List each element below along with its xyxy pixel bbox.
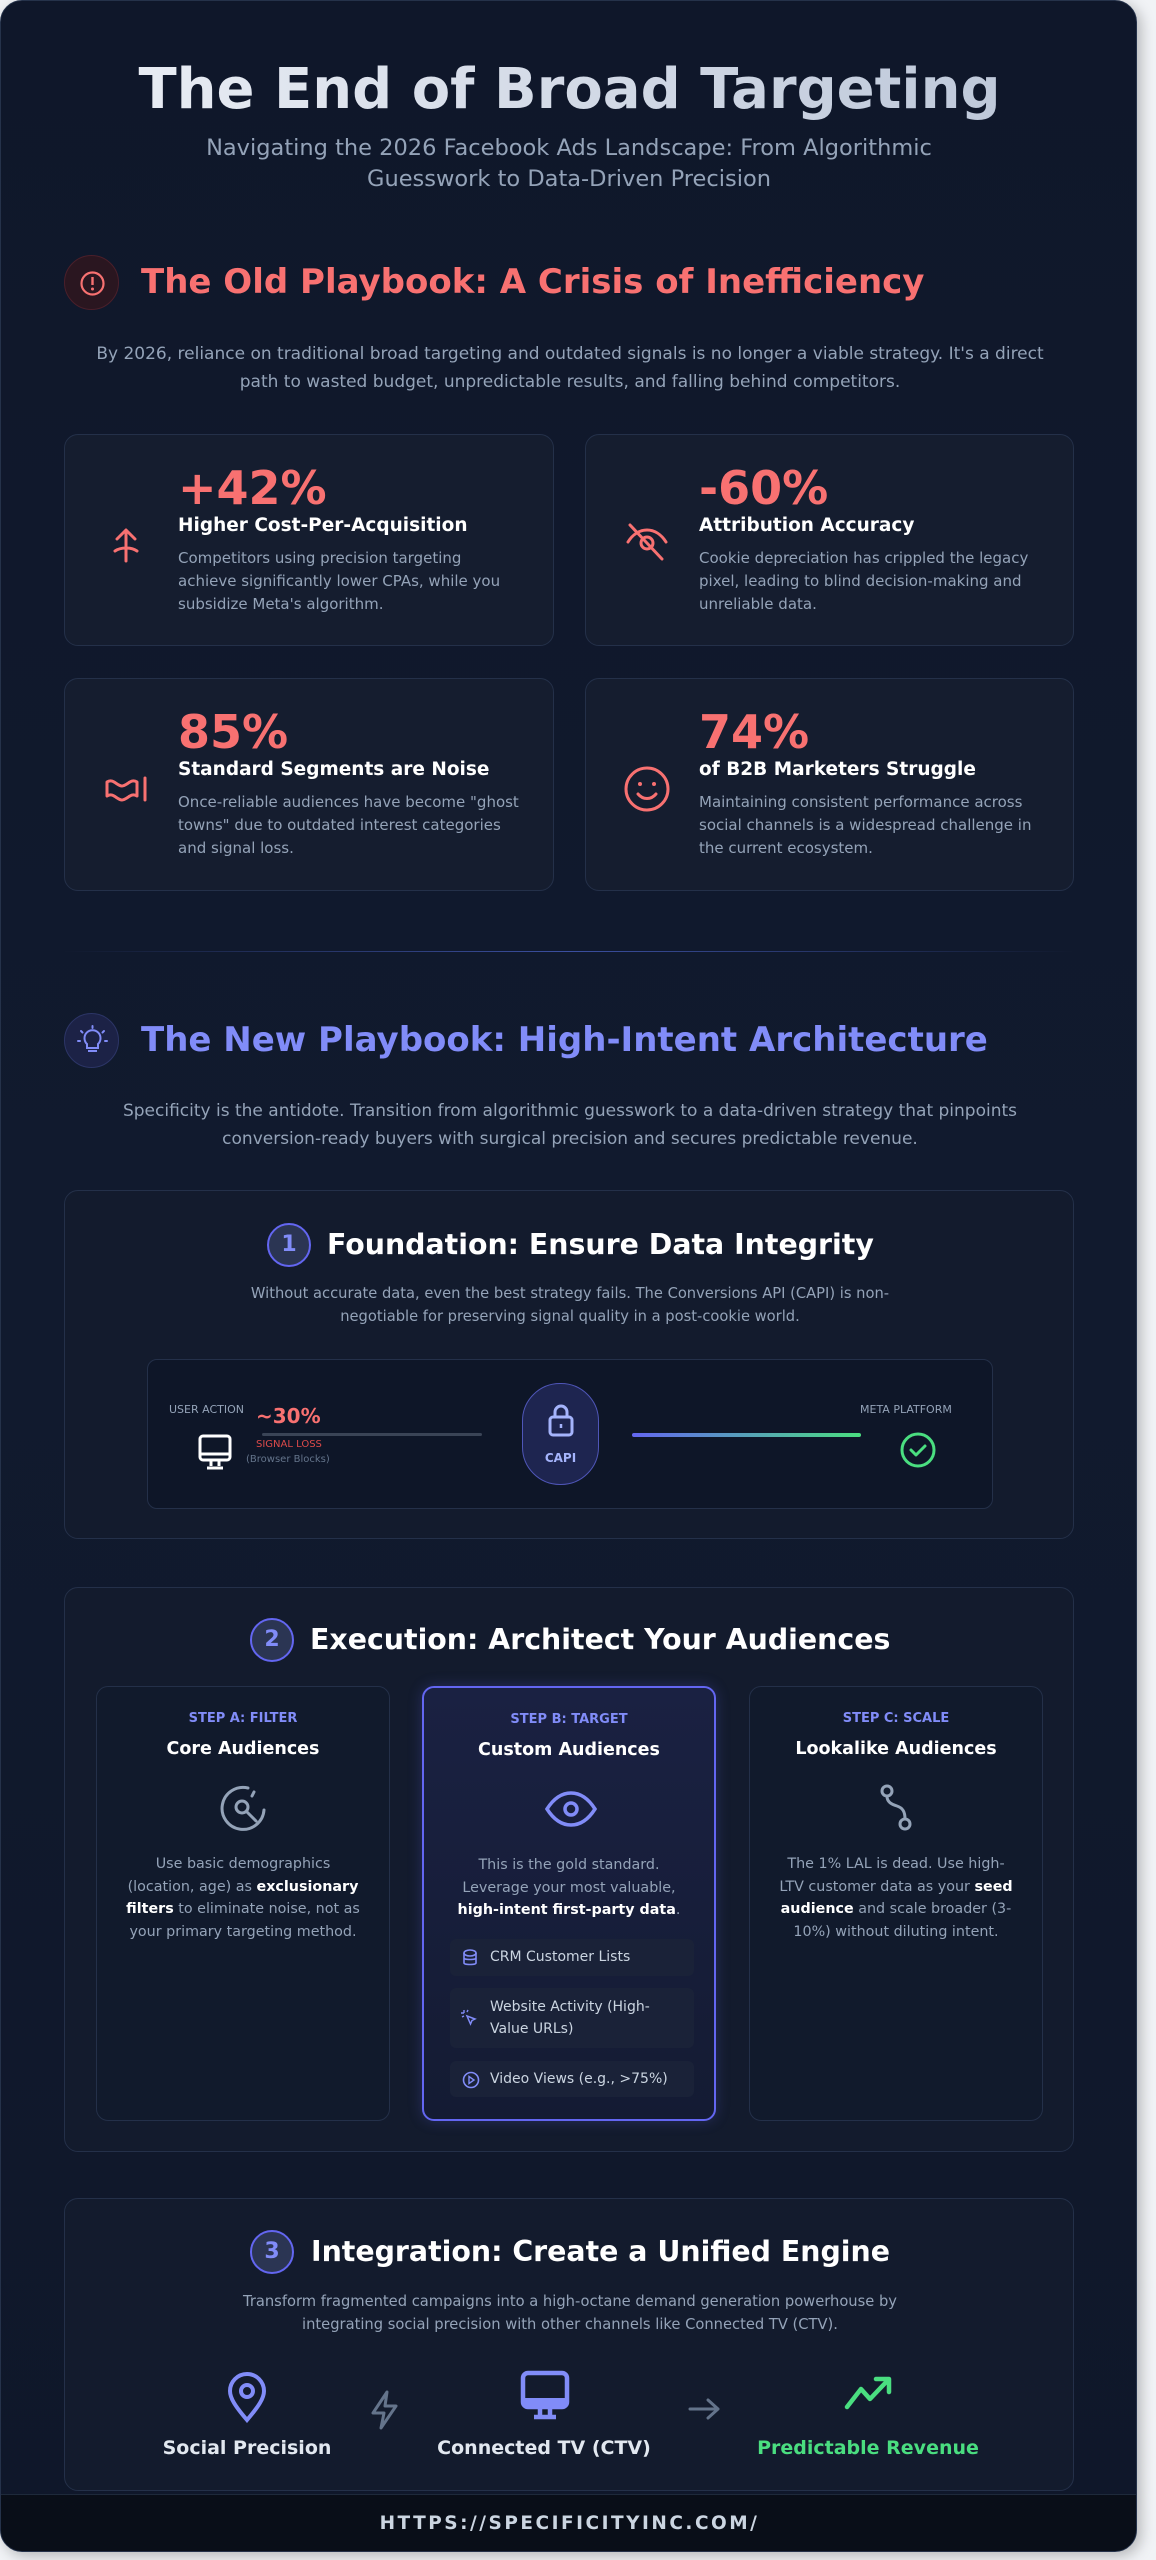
panel: integration <box>64 2198 1074 2491</box>
panel: stat 85%: Once-reliable audiences have become "ghost towns" due to outdated interest categories and signal loss. <box>178 793 519 857</box>
icon: target search <box>220 1786 266 1831</box>
column: custom audiences: This is the gold standard. Leverage your most valuable, high-intent first-party data. <box>458 1857 680 1918</box>
column: lookalike audiences: The 1% LAL is dead. Use high-LTV customer data as your seed audience and scale broader (3-10%) without diluting intent. <box>779 1856 1013 1940</box>
column: custom audiences <box>422 1686 716 2121</box>
column: lookalike audiences: STEP C: SCALE <box>843 1711 949 1726</box>
column: core audiences: Core Audiences <box>166 1739 319 1759</box>
subtitle: Navigating the 2026 Facebook Ads Landscape: From Algorithmic Guesswork to Data-Driven Precision <box>206 135 932 192</box>
step number 3 <box>250 2230 294 2274</box>
heading: new playbook: The New Playbook: High-Intent Architecture <box>141 1020 988 1060</box>
step number 2 <box>250 1618 294 1662</box>
footer: HTTPS://SPECIFICITYINC.COM/ <box>380 2513 759 2534</box>
panel: stat -60%: Cookie depreciation has crippled the legacy pixel, leading to blind decision-making and unreliable data. <box>699 549 1028 613</box>
step number 2: 2 <box>264 1627 280 1652</box>
panel: stat 74%: of B2B Marketers Struggle <box>699 759 976 780</box>
title: The End of Broad Targeting <box>138 57 1001 122</box>
panel: stat +42%: Higher Cost-Per-Acquisition <box>178 515 468 536</box>
panel: stat 74%: 74% <box>699 705 809 759</box>
icon: tv monitor <box>520 2370 570 2420</box>
panel: foundation <box>64 1190 1074 1539</box>
panel: stat 85%: 85% <box>178 705 288 759</box>
icon: CAPI lock <box>522 1383 599 1485</box>
step number 3: 3 <box>264 2239 280 2264</box>
column: lookalike audiences <box>749 1686 1043 2121</box>
icon: location pin <box>228 2372 266 2423</box>
panel: stat +42%: Competitors using precision targeting achieve significantly lower CPAs, while you subsidize Meta's algorithm. <box>178 549 500 613</box>
column: lookalike audiences: Lookalike Audiences <box>795 1739 997 1759</box>
step number 1 <box>267 1223 311 1267</box>
panel: execution <box>64 1587 1074 2152</box>
icon: CAPI lock: CAPI <box>545 1451 576 1465</box>
panel: stat +42% <box>64 434 554 646</box>
label: social precision: Social Precision <box>163 2437 331 2459</box>
panel: stat 85% <box>64 678 554 891</box>
icon: eye <box>545 1791 597 1827</box>
label: user action: USER ACTION <box>169 1403 244 1416</box>
panel: stat -60%: -60% <box>699 461 828 515</box>
intro text: new playbook: Specificity is the antidote. Transition from algorithmic guesswork to a data-driven strategy that pinpoints conversion-ready buyers with surgical precision and secures predictable revenue. <box>123 1101 1017 1149</box>
panel: stat -60% <box>585 434 1074 646</box>
text: integration: Transform fragmented campaigns into a high-octane demand generation powerhouse by integrating social precision with other channels like Connected TV (CTV). <box>243 2293 897 2333</box>
column: core audiences: STEP A: FILTER <box>189 1711 297 1726</box>
diagram: data flow: (Browser Blocks) <box>246 1454 330 1465</box>
icon: trending up <box>844 2376 892 2410</box>
label: connected tv: Connected TV (CTV) <box>437 2437 651 2459</box>
heading: execution: Execution: Architect Your Audiences <box>310 1623 890 1656</box>
icon: monitor <box>198 1434 232 1470</box>
list item: CRM: CRM Customer Lists <box>490 1949 630 1965</box>
panel: stat -60%: Attribution Accuracy <box>699 515 914 536</box>
icon: noise wave <box>106 776 146 802</box>
icon: arrow split <box>113 528 139 562</box>
icon: lightning <box>371 2390 398 2430</box>
list item: video: Video Views (e.g., >75%) <box>490 2071 668 2087</box>
icon: check <box>900 1432 936 1468</box>
list item: CRM <box>450 1939 694 1976</box>
column: core audiences: Use basic demographics (location, age) as exclusionary filters to eliminate noise, not as your primary targeting method. <box>126 1856 360 1940</box>
heading: foundation: Foundation: Ensure Data Integrity <box>327 1228 874 1261</box>
heading: old playbook: The Old Playbook: A Crisis of Inefficiency <box>141 262 924 302</box>
icon: alert <box>64 255 119 310</box>
intro text: old playbook: By 2026, reliance on traditional broad targeting and outdated signals is no longer a viable strategy. It's a direct path to wasted budget, unpredictable results, and falling behind competitors. <box>96 344 1044 392</box>
label: meta platform: META PLATFORM <box>860 1403 952 1416</box>
text: foundation: Without accurate data, even the best strategy fails. The Conversions API (CAPI) is non-negotiable for preserving signal quality in a post-cookie world. <box>251 1285 889 1325</box>
panel: stat 85%: Standard Segments are Noise <box>178 759 489 780</box>
label: predictable revenue: Predictable Revenue <box>757 2437 979 2459</box>
arrow <box>688 2398 720 2420</box>
list item: video <box>450 2061 694 2097</box>
icon: route <box>880 1784 912 1830</box>
signal loss stat: ~30% <box>256 1404 321 1428</box>
icon: bulb <box>64 1013 119 1068</box>
list item: website: Website Activity (High-Value URLs) <box>490 1999 650 2037</box>
column: custom audiences: STEP B: TARGET <box>510 1712 628 1727</box>
diagram: data flow <box>147 1359 993 1509</box>
step number 1: 1 <box>281 1232 297 1257</box>
list item: website <box>450 1988 694 2048</box>
column: custom audiences: Custom Audiences <box>478 1740 660 1760</box>
heading: integration: Integration: Create a Unified Engine <box>311 2235 890 2268</box>
panel: stat 74% <box>585 678 1074 891</box>
icon: eye off <box>626 523 668 561</box>
panel: stat +42%: +42% <box>178 461 327 515</box>
column: core audiences <box>96 1686 390 2121</box>
panel: stat 74%: Maintaining consistent performance across social channels is a widespread challenge in the current ecosystem. <box>699 793 1031 857</box>
diagram: data flow: SIGNAL LOSS <box>256 1439 322 1450</box>
footer <box>1 2494 1138 2553</box>
icon: smiley <box>624 766 670 812</box>
